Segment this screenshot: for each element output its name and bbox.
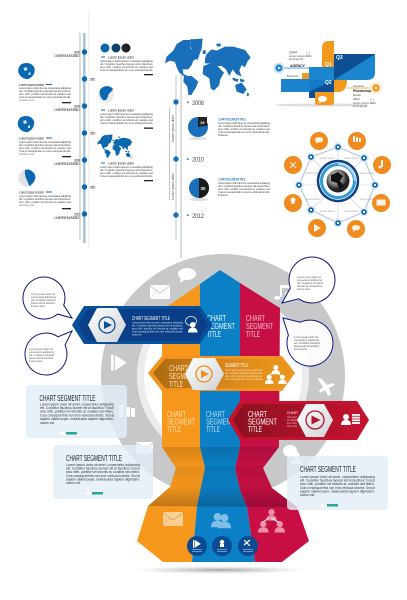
banner: blue hexagon: CHART SEGMENT TITLE <box>132 316 170 322</box>
callout: speech bubble lower left: elit. Curabitur faucibus <box>29 353 54 357</box>
pie one: 15 <box>200 120 205 125</box>
arrow: red column <box>235 283 309 562</box>
timeline labels <box>54 50 96 220</box>
blue wing <box>334 54 375 80</box>
banner: red hexagon: Lorem ipsum <box>287 415 297 419</box>
panel: text card left upper: sapien ullamcorper, malesuada sapien dignissim, <box>40 416 114 421</box>
central globe <box>316 160 360 202</box>
timeline labels: 2010 <box>90 184 96 190</box>
banner: orange hexagon: CHART <box>169 364 188 373</box>
banner: orange hexagon: SEGMENT <box>169 372 196 381</box>
panel: world map timeline with pies <box>165 39 270 258</box>
year markers: 2010 <box>192 158 205 164</box>
left block three: elit. Curabitur faucibus laoreet elit at faucibus. <box>19 197 71 201</box>
right block one: arcu nibh, porttitor vel lobortis at, sodales sed <box>100 65 153 69</box>
callout: speech bubble lower left: Lorem ipsum dolor sit <box>29 347 53 351</box>
right block one: Lorem ipsum dolor <box>108 56 135 60</box>
callout: speech bubble lower right: consectetur adipiscing <box>294 338 319 342</box>
left block one <box>18 62 71 103</box>
timeline labels: 2000 <box>74 50 81 54</box>
pie one text: CHART SEGMENT TITLE <box>218 118 247 122</box>
banner: orange hexagon: Lorem ipsum dolor sit amet, consectetur <box>225 368 262 372</box>
pie two text: arcu nibh, porttitor vel lobortis at, sodales sed <box>218 187 270 191</box>
year markers: 2012 <box>192 214 205 220</box>
icon: music note <box>274 285 291 300</box>
pie one text: Cras consequat felis non eros vehicula lobortis. <box>218 130 270 134</box>
panel: text card left upper <box>26 385 127 438</box>
arrow labels: CHART <box>206 410 225 419</box>
vertical captions: Lorem ipsum dolor <box>171 114 175 142</box>
callout: speech bubble lower right: Fusce arcu <box>294 347 307 351</box>
icon: headset person <box>186 316 198 332</box>
right text: sit amet elit <box>353 104 367 108</box>
callout: speech bubble lower right: Lorem ipsum dolor sit <box>294 335 318 339</box>
Q labels <box>325 55 343 86</box>
right block three with small map: Cras consequat felis non eros vehicula lobortis. <box>100 174 153 178</box>
left block two: Lorem ipsum dolor sit amet, consectetur adipiscing <box>19 140 71 144</box>
arrow labels: SEGMENT <box>207 322 235 331</box>
banner: red hexagon: arcu nibh, <box>287 421 297 425</box>
pie two text: elit. Curabitur faucibus laoreet elit at faucibus. <box>218 184 270 188</box>
left text <box>287 50 312 78</box>
icon: mail <box>150 285 170 299</box>
icon: play <box>111 355 127 371</box>
ring icons <box>111 268 335 464</box>
right block three with small map: elit. Curabitur faucibus laoreet elit at faucibus. <box>100 168 153 172</box>
left block one: luctus est. <box>19 98 35 102</box>
banner: blue hexagon: arcu nibh, porttitor vel lobortis at, sodales sed <box>132 326 183 330</box>
callout: speech bubble lower left <box>25 331 72 375</box>
left block three: Lorem ipsum dolor <box>19 190 45 194</box>
banner: blue hexagon: luctus est. <box>132 332 142 336</box>
node captions: Lorem ipsum <box>360 172 374 175</box>
left block one: Cras consequat felis non eros vehicula lobortis. <box>19 95 71 99</box>
banner: red hexagon: Cras conse <box>287 424 297 428</box>
callout: speech bubble lower right <box>283 318 333 366</box>
banner: red hexagon: CHART <box>287 410 298 415</box>
pie two <box>189 178 209 201</box>
callout: speech bubble top left: elit. Curabitur faucibus <box>31 298 56 302</box>
pie two: 30 <box>200 186 206 191</box>
node captions: Lorem ipsum <box>344 210 358 213</box>
banner: blue hexagon <box>72 306 213 344</box>
orange tab <box>322 41 334 67</box>
year markers: 2008 <box>192 101 205 107</box>
panel: text card left lower: elit. Curabitur faucibus laoreet elit at faucibus. Fusce <box>66 466 141 471</box>
timeline labels: 2008 <box>74 158 81 162</box>
node captions: Lorem ipsum <box>360 198 374 201</box>
icon: plane <box>317 378 335 396</box>
banner: orange hexagon: arcu nibh, porttitor vel lobortis at, <box>225 374 262 378</box>
node captions: Lorem ipsum <box>344 157 358 160</box>
left block one: elit. Curabitur faucibus laoreet elit at faucibus. <box>19 89 71 93</box>
central blue blocks <box>309 67 334 80</box>
left block one: Lorem ipsum dolor sit amet, consectetur adipiscing <box>19 86 71 90</box>
bottom icons <box>163 509 285 533</box>
banner: red hexagon: SEGMENT <box>248 418 277 426</box>
left block two <box>18 116 71 157</box>
banner: red hexagon <box>228 401 369 440</box>
panel: text card left lower: arcu nibh, porttitor vel lobortis at, sodales sed libero. <box>66 469 140 474</box>
arrow labels: CHART <box>207 314 226 323</box>
right block two: Lorem ipsum dolor <box>108 108 135 112</box>
timeline labels: 2012 <box>74 212 81 216</box>
timeline labels: 2004 <box>74 104 81 108</box>
pie two text: CHART SEGMENT TITLE <box>218 178 247 182</box>
arrow: orange column <box>137 284 205 562</box>
pie two text: Cras consequat felis non eros vehicula lobortis. <box>218 190 270 194</box>
callout: speech bubble top right: laoreet elit at faucibus <box>297 284 322 288</box>
node captions: Lorem ipsum <box>320 210 334 213</box>
pie one text: luctus est. <box>218 133 228 137</box>
banner: red hexagon: TITLE <box>248 425 262 434</box>
Q labels: Q2 <box>325 80 332 86</box>
arrow labels: SEGMENT <box>206 418 234 426</box>
left block three: arcu nibh, porttitor vel lobortis at, sodales sed <box>19 200 71 204</box>
panel: text card right: sapien ullamcorper, malesuada sapien dignissim, <box>300 488 375 493</box>
pie one text: Lorem ipsum dolor sit amet, consectetur adipiscing <box>218 121 270 125</box>
pie one text: arcu nibh, porttitor vel lobortis at, sodales sed <box>218 127 270 131</box>
panel: text card right: Lorem ipsum dolor sit amet, consectetur adipiscing <box>300 474 375 479</box>
callout: speech bubble top right <box>282 257 335 303</box>
Q labels: Q3 <box>336 55 343 61</box>
left block two: luctus est. <box>19 152 35 156</box>
callout: speech bubble lower left: laoreet elit at faucibus <box>29 356 53 360</box>
right block two <box>98 86 153 129</box>
node captions: Lorem ipsum <box>320 157 334 160</box>
orange blocks <box>334 80 347 92</box>
panel: circular network diagram <box>284 132 391 238</box>
right connector <box>347 82 382 94</box>
left text: 2004 <box>289 50 297 54</box>
icon: person with list <box>341 414 360 425</box>
timeline labels: CHART SEGMENT TITLE <box>54 107 80 112</box>
vertical timeline lines <box>169 75 182 258</box>
pie one text: elit. Curabitur faucibus laoreet elit at faucibus. <box>218 124 270 128</box>
timeline labels: CHART SEGMENT TITLE <box>54 215 80 220</box>
arrow: blue column <box>192 270 255 562</box>
panel: text card right: arcu nibh, porttitor vel lobortis at, sodales sed libero. <box>300 481 375 486</box>
vertical captions <box>171 114 175 200</box>
panel: text card left lower: Lorem ipsum dolor sit amet, consectetur adipiscing <box>66 462 140 467</box>
banner: red hexagon: elit. Curabitur <box>287 418 297 422</box>
icon: bars <box>119 405 135 417</box>
vertical captions: Lorem ipsum dolor <box>171 172 175 200</box>
callout: speech bubble lower left: consectetur adipiscing <box>29 350 54 354</box>
left block two: Cras consequat felis non eros vehicula lobortis. <box>19 149 71 153</box>
right block two: Lorem ipsum dolor sit amet, consectetur adipiscing <box>100 112 153 116</box>
callout: speech bubble top left <box>23 277 72 319</box>
pie one <box>188 117 208 140</box>
node captions: Lorem ipsum <box>306 198 320 201</box>
pie two text: luctus est. <box>218 193 228 197</box>
banner: red hexagon: CHART <box>248 410 267 419</box>
right block three with small map: Lorem ipsum dolor <box>108 162 135 166</box>
right block two: arcu nibh, porttitor vel lobortis at, sodales sed <box>100 118 153 122</box>
panel: text card left lower <box>53 445 153 499</box>
panel: text card right: luctus est. <box>300 492 315 497</box>
right block one: Cras consequat felis non eros vehicula lobortis. <box>100 68 153 72</box>
panel: text card left lower: Cras consequat felis non eros vehicula lobortis. Sed at <box>66 473 141 478</box>
icon: mail lower <box>136 442 153 454</box>
ground shadow <box>130 566 310 574</box>
panel: text card right: CHART SEGMENT TITLE <box>300 465 356 474</box>
timeline dots <box>82 49 87 217</box>
timeline labels: CHART SEGMENT TITLE <box>54 161 80 166</box>
callout: speech bubble lower left: Fusce arcu <box>29 359 43 363</box>
callout: speech bubble top right: consectetur adipiscing <box>297 278 322 282</box>
left block one: arcu nibh, porttitor vel lobortis at, sodales sed <box>19 92 71 96</box>
right text: Camera <box>353 84 364 88</box>
right block two: Cras consequat felis non eros vehicula lobortis. <box>100 121 153 125</box>
left text: sit amet elit <box>289 57 303 61</box>
banner: orange hexagon <box>148 356 295 391</box>
left block two: elit. Curabitur faucibus laoreet elit at faucibus. <box>19 143 71 147</box>
panel: text card left upper: Lorem ipsum dolor sit amet, consectetur adipiscing <box>40 402 114 406</box>
banner: orange hexagon: TITLE <box>169 380 183 389</box>
pie one text <box>218 118 270 137</box>
right block three with small map: arcu nibh, porttitor vel lobortis at, sodales sed <box>100 171 153 175</box>
right text: 2004 <box>353 97 360 101</box>
panel: text card right: Cras consequat felis non eros vehicula lobortis. Sed at <box>300 485 376 490</box>
timeline labels: CHART SEGMENT TITLE <box>54 53 80 58</box>
panel: text card left upper: CHART SEGMENT TITLE <box>40 394 96 403</box>
ground shadow <box>274 104 370 106</box>
bottom circle badges <box>187 536 258 556</box>
panel: double timeline with globes <box>18 10 153 248</box>
grey ring <box>119 272 327 480</box>
timeline labels: 2006 <box>90 130 96 136</box>
banner: orange hexagon: Cras consequat felis non eros vehicula <box>225 377 262 381</box>
icon: team network <box>265 365 287 384</box>
panel: text card right <box>287 456 388 510</box>
arrow labels: SEGMENT <box>167 418 195 426</box>
speech icon <box>318 96 327 104</box>
panel: text card left lower: sapien ullamcorper, malesuada sapien dignissim, <box>66 476 140 481</box>
network nodes <box>294 142 380 228</box>
left block three <box>18 169 71 209</box>
left text: AGENCY <box>290 64 306 68</box>
world map <box>165 39 251 97</box>
arrow labels: SEGMENT <box>246 322 273 331</box>
banner: blue hexagon: Cras consequat felis non eros vehicula lobortis. <box>132 330 183 334</box>
node captions: Lorem ipsum <box>306 172 320 175</box>
timeline labels: 2002 <box>90 76 96 82</box>
arrow labels: TITLE <box>207 330 221 339</box>
pie two text <box>218 178 270 197</box>
callout: speech bubble top left: consectetur adipiscing <box>31 295 56 299</box>
arrow labels: TITLE <box>167 425 181 434</box>
right block three with small map: Lorem ipsum dolor sit amet, consectetur adipiscing <box>100 165 153 169</box>
arrow labels: CHART <box>246 314 265 323</box>
icon: headset person <box>283 445 302 464</box>
right block one: elit. Curabitur faucibus laoreet elit at faucibus. <box>100 62 153 66</box>
right block one <box>100 44 153 75</box>
right block one: Lorem ipsum dolor sit amet, consectetur adipiscing <box>100 59 153 63</box>
callout: speech bubble top right: Fusce arcu <box>297 287 310 291</box>
left connector <box>274 62 309 74</box>
arrow labels: TITLE <box>246 330 260 339</box>
right text: Photoshop <box>353 89 371 93</box>
connection lines <box>299 147 375 223</box>
year markers <box>173 99 205 220</box>
panel: text card left upper: elit. Curabitur faucibus laoreet elit at faucibus. Fusce <box>40 405 115 410</box>
pie two text: Lorem ipsum dolor sit amet, consectetur adipiscing <box>218 181 270 185</box>
callout: speech bubble lower right: elit. Curabitur faucibus <box>294 341 320 345</box>
callout: speech bubble top right: Lorem ipsum dolor sit <box>297 275 321 279</box>
panel: main arrow infographic <box>111 268 335 574</box>
panel: text card left lower: CHART SEGMENT TITLE <box>66 454 122 463</box>
panel: text card left upper: Cras consequat felis non eros vehicula lobortis. Sed at <box>40 412 115 417</box>
left block three: Lorem ipsum dolor sit amet, consectetur adipiscing <box>19 194 71 198</box>
banner: orange hexagon: elit. Curabitur faucibus laoreet elit at <box>225 371 262 375</box>
right block three with small map <box>97 135 153 181</box>
left block one: Lorem ipsum dolor <box>19 83 45 87</box>
callout: speech bubble top right: elit. Curabitur faucibus <box>297 281 323 285</box>
panel: text card left upper: luctus est. <box>40 420 55 425</box>
node captions <box>306 157 374 213</box>
callout: speech bubble lower right: laoreet elit at faucibus <box>294 344 319 348</box>
callout: speech bubble top left: laoreet elit at faucibus <box>31 301 55 305</box>
panel: text card left lower: luctus est. <box>66 480 81 485</box>
fold shading <box>148 447 297 507</box>
left text: Business <box>287 74 299 78</box>
banner: blue hexagon: Lorem ipsum dolor sit amet, consectetur adipiscing <box>132 320 183 324</box>
Q labels: Q1 <box>325 62 332 68</box>
left text: Lorem ipsum dolor <box>289 54 312 58</box>
arrow labels: CHART <box>167 410 186 419</box>
right text <box>353 84 376 108</box>
right text: Lorem ipsum dolor <box>353 101 376 105</box>
left block two: Lorem ipsum dolor <box>19 136 45 140</box>
callout: speech bubble top left: Fusce arcu <box>31 304 45 308</box>
left block two: arcu nibh, porttitor vel lobortis at, sodales sed <box>19 146 71 150</box>
right block two: elit. Curabitur faucibus laoreet elit at faucibus. <box>100 115 153 119</box>
panel: text card left upper: arcu nibh, porttitor vel lobortis at, sodales sed libero. <box>40 409 114 414</box>
panel: text card right: elit. Curabitur faucibus laoreet elit at faucibus. Fusce <box>300 478 376 483</box>
icon: speech <box>178 268 196 283</box>
panel: Q1 Q2 Q3 block chart <box>274 41 382 108</box>
arrow labels <box>167 314 273 434</box>
banner: blue hexagon: elit. Curabitur faucibus laoreet elit at faucibus. <box>132 324 183 328</box>
callout: speech bubble top left: Lorem ipsum dolor sit <box>31 292 55 296</box>
arrow labels: TITLE <box>206 425 220 434</box>
orange circles <box>284 132 391 238</box>
orange circle icons <box>290 136 386 232</box>
left block three: luctus est. <box>19 203 35 207</box>
banner: orange hexagon: SEGMENT TITLE <box>225 363 248 369</box>
right text: Retail <box>353 93 361 97</box>
